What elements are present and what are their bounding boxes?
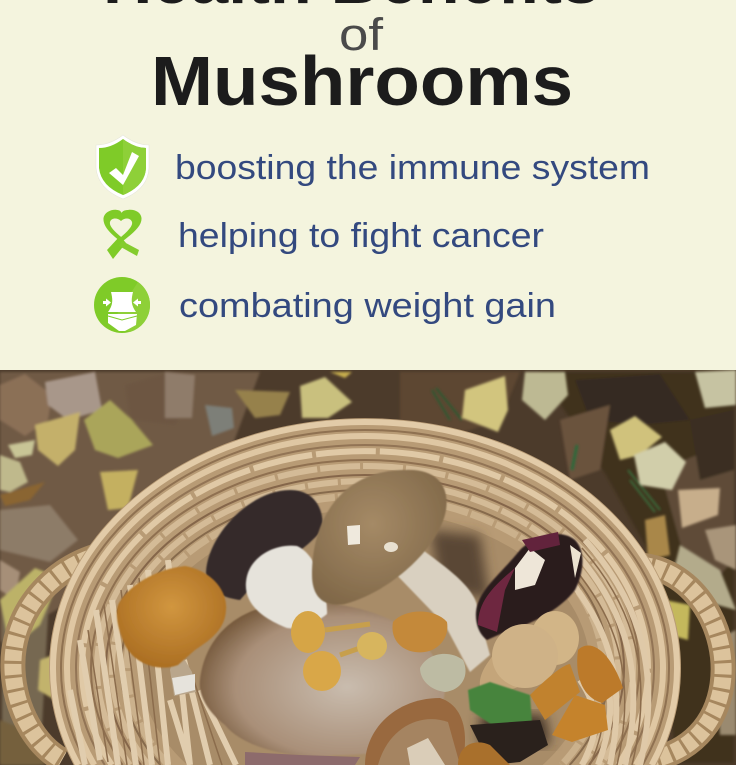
bottom pink mushroom bbox=[245, 752, 360, 765]
icon: shield with check bbox=[96, 135, 149, 199]
dark soil clump bbox=[470, 720, 548, 765]
mushroom: small grey cap bbox=[420, 654, 466, 692]
page background bbox=[0, 0, 736, 370]
benefit list bbox=[94, 135, 650, 333]
mushroom: white cap bbox=[246, 546, 327, 628]
mushroom: orange fan caps bbox=[530, 646, 623, 742]
text: boosting the immune system: boosting the immune system bbox=[175, 149, 650, 187]
title line: Mushrooms: Mushrooms bbox=[151, 42, 573, 120]
text: helping to fight cancer: helping to fight cancer bbox=[178, 217, 544, 255]
mushroom: brown bolete cap bbox=[312, 470, 447, 605]
photo: basket of mushrooms on autumn leaves bbox=[0, 370, 736, 765]
mushroom: brown gilled cap bottom bbox=[365, 698, 510, 765]
moss bbox=[468, 682, 532, 727]
icon: ribbon with heart bbox=[103, 210, 142, 259]
title bbox=[103, 0, 600, 120]
icon: waistline circle bbox=[94, 277, 150, 333]
title line: of: of bbox=[339, 9, 384, 60]
mushroom: beige puffballs bbox=[480, 611, 579, 692]
text: combating weight gain: combating weight gain bbox=[179, 287, 556, 325]
basket left handle bbox=[13, 552, 118, 760]
basket right handle bbox=[640, 565, 723, 760]
forest floor base bbox=[0, 370, 736, 765]
mushroom: stem of brown bolete bbox=[390, 548, 490, 672]
mushroom: orange gilled cap bbox=[117, 566, 226, 696]
mushroom: small yellow caps with stems bbox=[291, 611, 447, 691]
mushroom: burgundy cap bbox=[476, 532, 582, 640]
mushroom: dark purple cap bbox=[206, 490, 323, 600]
mushroom: large pale cap bbox=[200, 602, 445, 756]
basket body bbox=[49, 418, 681, 765]
fallen leaves bbox=[0, 370, 736, 765]
forest floor patches bbox=[0, 372, 734, 763]
